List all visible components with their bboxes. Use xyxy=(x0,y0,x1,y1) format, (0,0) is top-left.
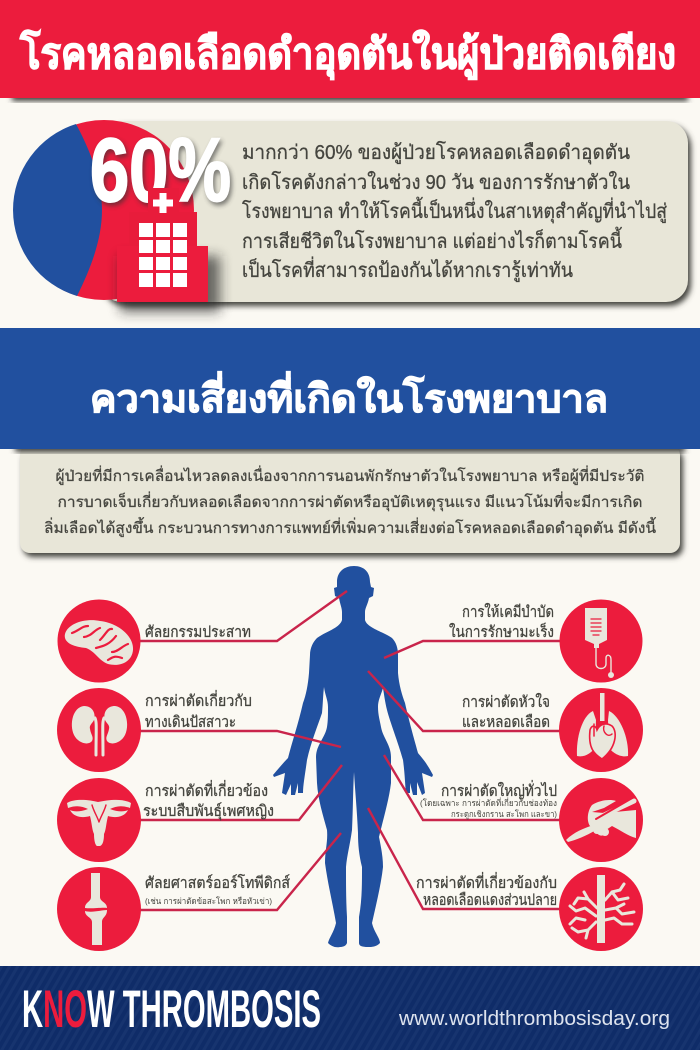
panel: hospital risk intro: ลิ่มเลือดได้สูงขึ้น กระบวนการทางการแพทย์ที่เพิ่มความเสี่ยงต่อโรคหลอดเลือดดำอุดตัน มีดังนี้ xyxy=(44,517,656,538)
section heading band: ความเสี่ยงที่เกิดในโรงพยาบาล xyxy=(90,371,608,421)
label: ทางเดินปัสสาวะ xyxy=(145,714,236,731)
icon: uterus xyxy=(57,778,141,862)
pie chart xyxy=(13,120,194,300)
icon: kidneys xyxy=(57,688,141,772)
panel: 60 percent statistic xyxy=(13,120,691,312)
label xyxy=(145,690,252,731)
icon: knee joint xyxy=(57,867,141,951)
label: การผ่าตัดเกี่ยวกับ xyxy=(145,690,252,710)
label: และหลอดเลือด xyxy=(462,713,550,731)
connector lines xyxy=(138,591,562,910)
label xyxy=(143,780,274,821)
label: ในการรักษามะเร็ง xyxy=(449,622,554,641)
label: หลอดเลือดแดงส่วนปลาย xyxy=(423,891,557,909)
label: กระดูกเชิงกราน สะโพก และขา) xyxy=(451,809,557,820)
label: การให้เคมีบำบัด xyxy=(462,603,554,621)
label: (เช่น การผ่าตัดข้อสะโพก หรือหัวเข่า) xyxy=(145,896,272,906)
item: peripheral arterial surgery xyxy=(416,867,643,951)
label: การผ่าตัดหัวใจ xyxy=(462,693,550,711)
icon: hand holding scalpel xyxy=(559,778,643,862)
item: urinary tract surgery xyxy=(57,688,252,772)
label xyxy=(420,780,557,820)
label: การผ่าตัดที่เกี่ยวข้อง xyxy=(145,780,268,800)
icon: brain xyxy=(58,600,140,682)
icon: hospital xyxy=(117,188,220,312)
label xyxy=(416,872,557,909)
statistic text xyxy=(242,141,667,283)
60 percent figure: 60% xyxy=(92,124,233,224)
label xyxy=(462,693,550,731)
panel: hospital risk intro: ผู้ป่วยที่มีการเคลื่อนไหวลดลงเนื่องจากการนอนพักรักษาตัวในโรงพยาบาล หรือผู้ที่มีประวัติ xyxy=(56,465,644,485)
icon: arteries xyxy=(559,867,643,951)
label: ศัลยศาสตร์ออร์โทพีดิกส์ xyxy=(145,874,290,892)
title banner xyxy=(0,0,700,101)
panel: hospital risk intro xyxy=(20,445,683,557)
icon: heart and lungs xyxy=(559,688,643,772)
footer band xyxy=(0,966,700,1050)
item: chemotherapy xyxy=(449,600,642,682)
label: ระบบสืบพันธุ์เพศหญิง xyxy=(143,802,274,821)
item: major general surgery xyxy=(420,778,643,862)
item: female reproductive surgery xyxy=(57,778,274,862)
statistic text: มากกว่า 60% ของผู้ป่วยโรคหลอดเลือดดำอุดตัน xyxy=(242,141,630,165)
text panel background xyxy=(100,121,691,306)
panel: hospital risk intro: การบาดเจ็บเกี่ยวกับหลอดเลือดจากการผ่าตัดหรืออุบัติเหตุรุนแรง มีแนวโน้มที่จะมีการเกิด xyxy=(58,491,642,512)
statistic text: เกิดโรคดังกล่าวในช่วง 90 วัน ของการรักษาตัวใน xyxy=(242,171,630,194)
label: การผ่าตัดใหญ่ทั่วไป xyxy=(441,780,557,800)
label: การผ่าตัดที่เกี่ยวข้องกับ xyxy=(416,872,557,892)
section heading band xyxy=(0,328,700,452)
statistic text: เป็นโรคที่สามารถป้องกันได้หากเรารู้เท่าทัน xyxy=(242,256,573,283)
website: www.worldthrombosisday.org xyxy=(398,1008,670,1030)
item: cardiovascular surgery xyxy=(462,688,643,772)
logo: Know Thrombosis: KNOW THROMBOSIS xyxy=(22,980,321,1039)
item: neurosurgery xyxy=(58,600,251,682)
label xyxy=(449,603,554,641)
label: (โดยเฉพาะ การผ่าตัดที่เกี่ยวกับช่องท้อง xyxy=(420,797,557,808)
icon: IV bag xyxy=(560,600,642,682)
label: ศัลยกรรมประสาท xyxy=(145,624,251,641)
label xyxy=(145,874,290,906)
statistic text: การเสียชีวิตในโรงพยาบาล แต่อย่างไรก็ตามโรคนี้ xyxy=(242,227,622,253)
60 percent figure: 60% xyxy=(90,121,231,221)
body silhouette xyxy=(273,566,433,947)
item: orthopaedic surgery xyxy=(57,867,290,951)
